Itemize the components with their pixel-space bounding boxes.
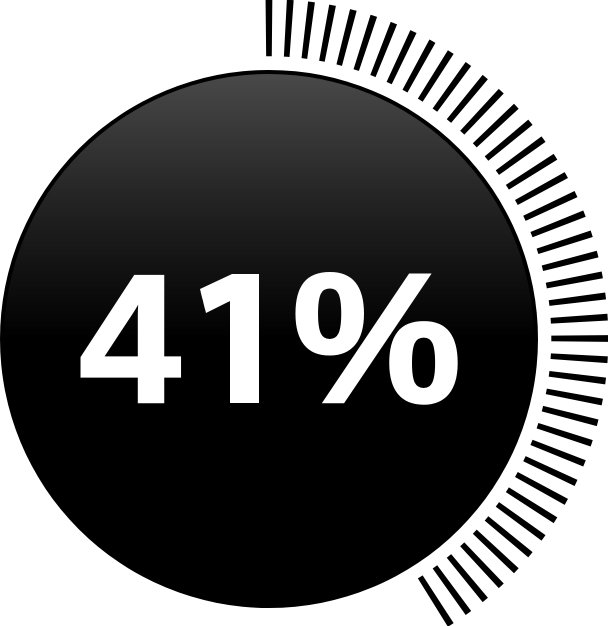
percentage value: %: [292, 235, 461, 441]
percentage value: 4: [79, 236, 181, 441]
percentage value: 1: [177, 236, 299, 441]
dial: black circle with glossy top: [0, 70, 538, 608]
progress ticks: 41 percent gauge arc: [264, 28, 580, 605]
percentage value: [80, 272, 458, 405]
